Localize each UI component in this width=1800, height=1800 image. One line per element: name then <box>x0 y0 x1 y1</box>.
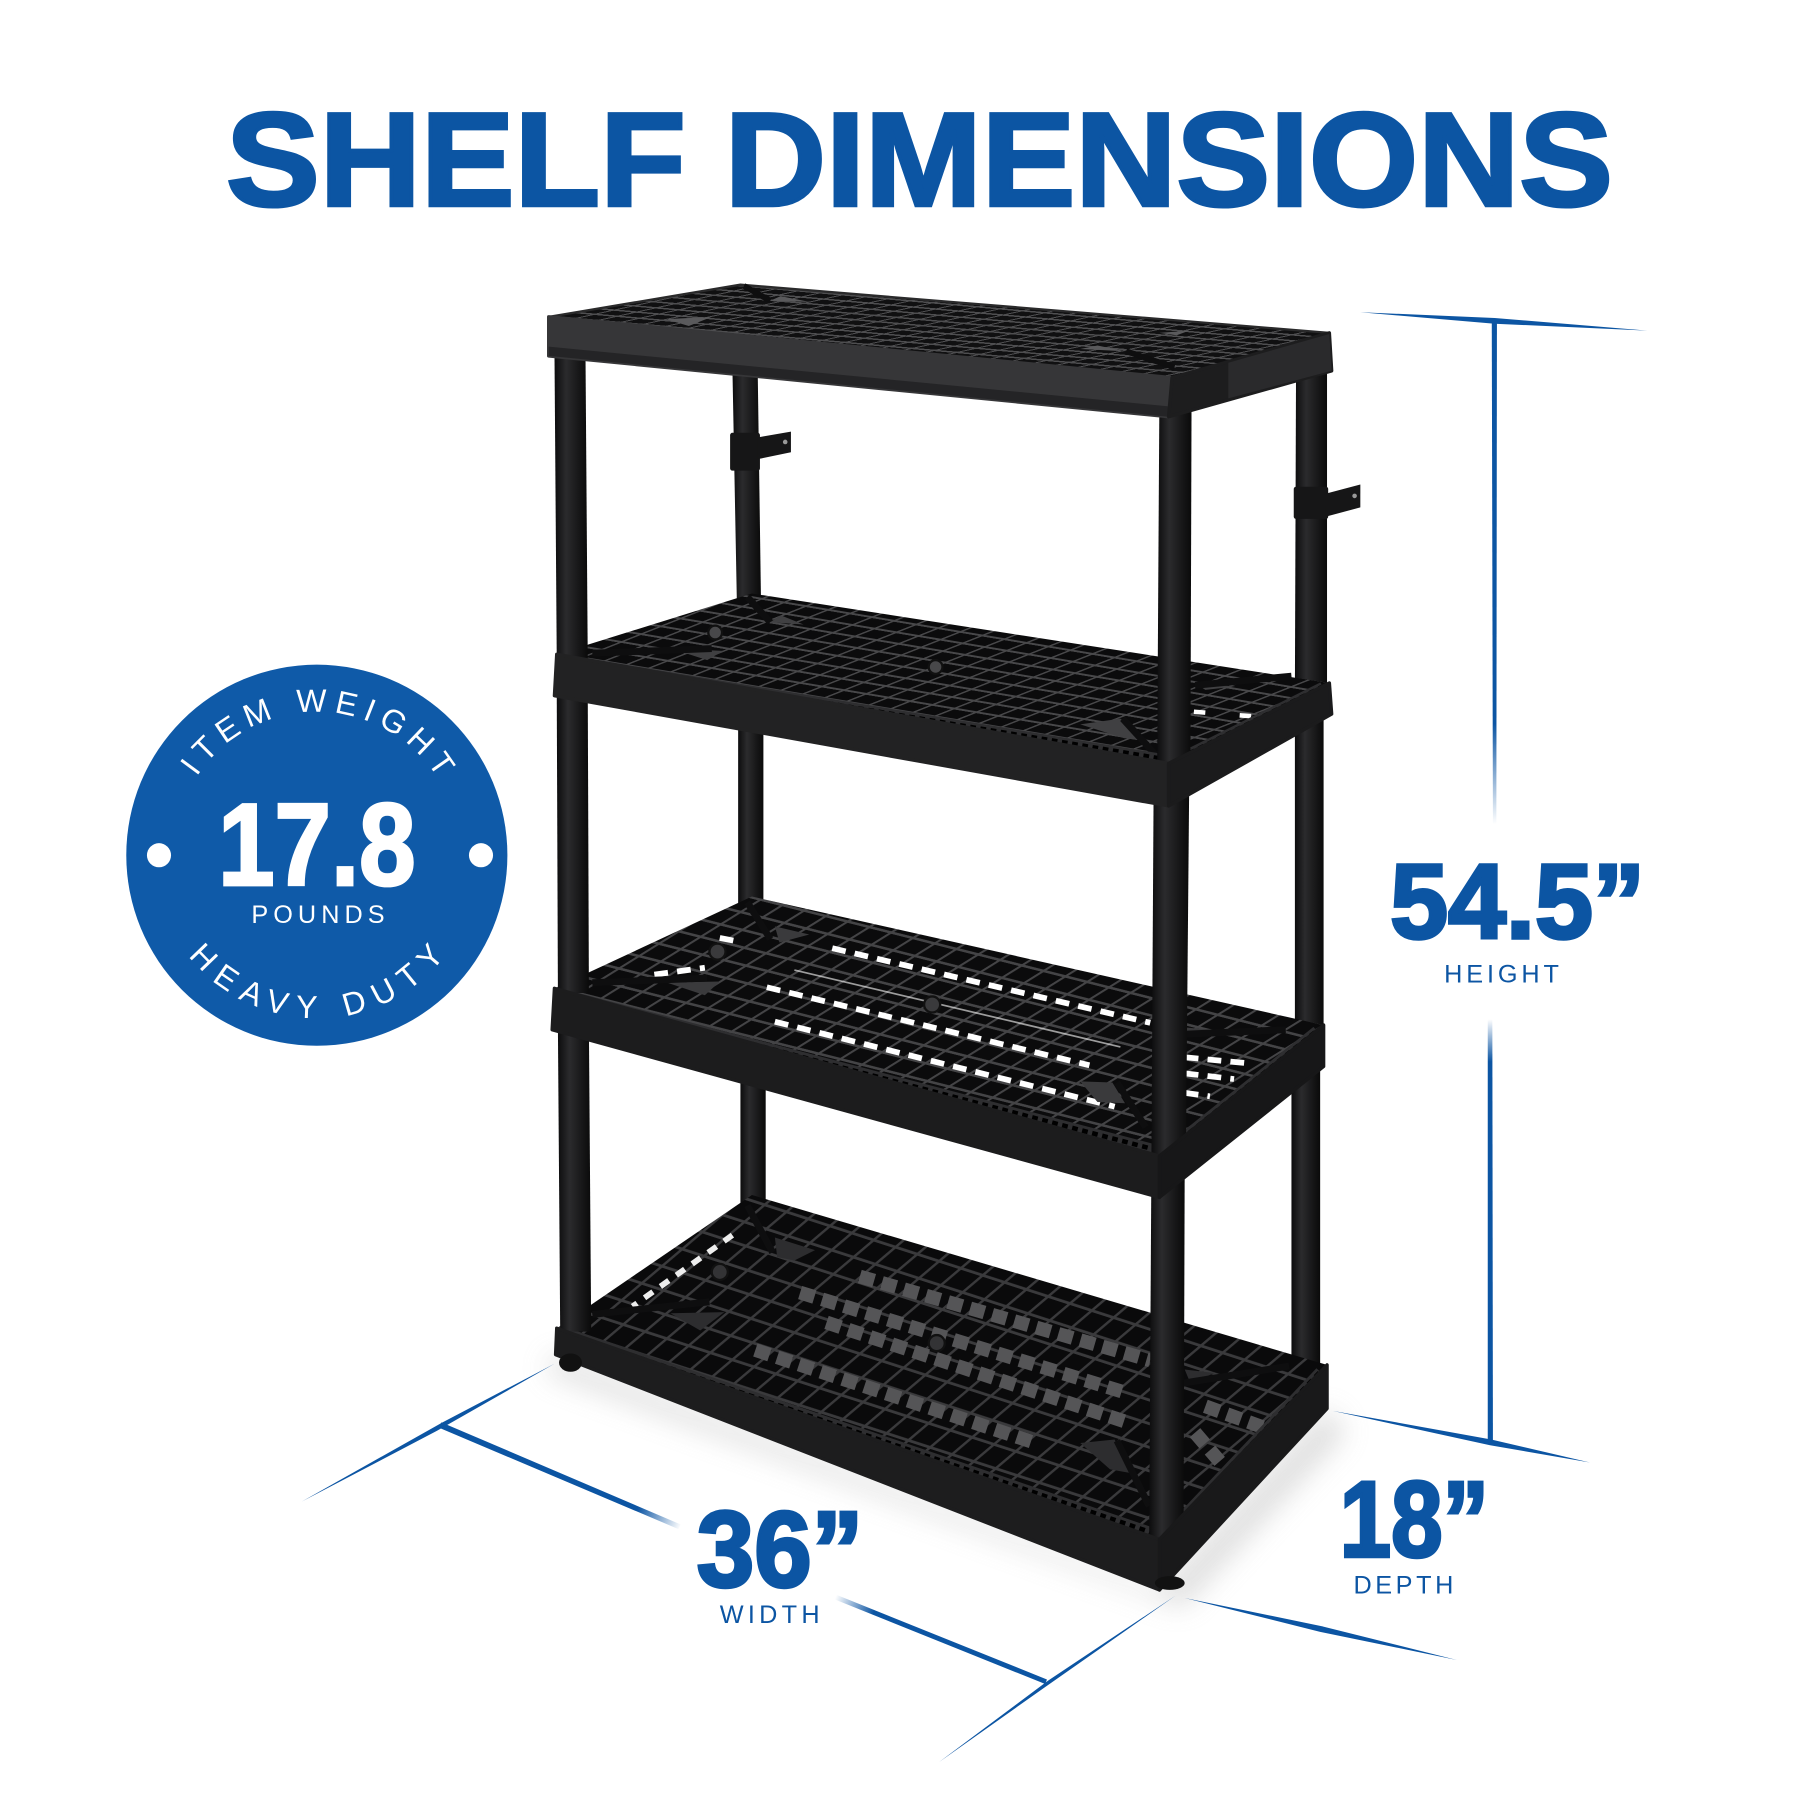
badge: item weight: ITEM WEIGHT <box>180 690 456 774</box>
front post middle left <box>557 695 589 993</box>
feet <box>559 1353 582 1372</box>
front post upper right <box>1157 390 1192 767</box>
front post lower left <box>558 1027 591 1332</box>
back posts <box>732 367 1327 1372</box>
wall brackets <box>730 432 1360 519</box>
width label: 36” <box>697 1488 863 1609</box>
badge: item weight: POUNDS <box>251 901 385 929</box>
depth label: DEPTH <box>1353 1571 1453 1599</box>
front post middle right <box>1151 775 1189 1162</box>
shelf 4 <box>556 1027 1327 1590</box>
height label: HEIGHT <box>1444 961 1559 989</box>
badge: item weight <box>126 664 508 1046</box>
height dimension lines <box>1333 312 1647 1463</box>
shelving unit <box>549 285 1360 1590</box>
front post upper left <box>554 350 588 660</box>
width and depth dimension lines <box>302 1364 1457 1762</box>
title: SHELF DIMENSIONS <box>226 85 1613 234</box>
width label: WIDTH <box>720 1601 820 1629</box>
depth label: 18” <box>1340 1459 1489 1580</box>
badge: item weight: 17.8 <box>218 779 416 910</box>
floor shadow <box>545 1355 1345 1607</box>
shelf 2 <box>554 350 1332 806</box>
badge: item weight: HEAVY DUTY <box>190 942 440 1018</box>
front post lower right <box>1149 1165 1185 1544</box>
height label: 54.5” <box>1390 843 1645 961</box>
shelf dimensions infographic <box>126 110 1647 1762</box>
shelf 1 <box>549 285 1332 417</box>
shelf 3 <box>552 695 1324 1197</box>
